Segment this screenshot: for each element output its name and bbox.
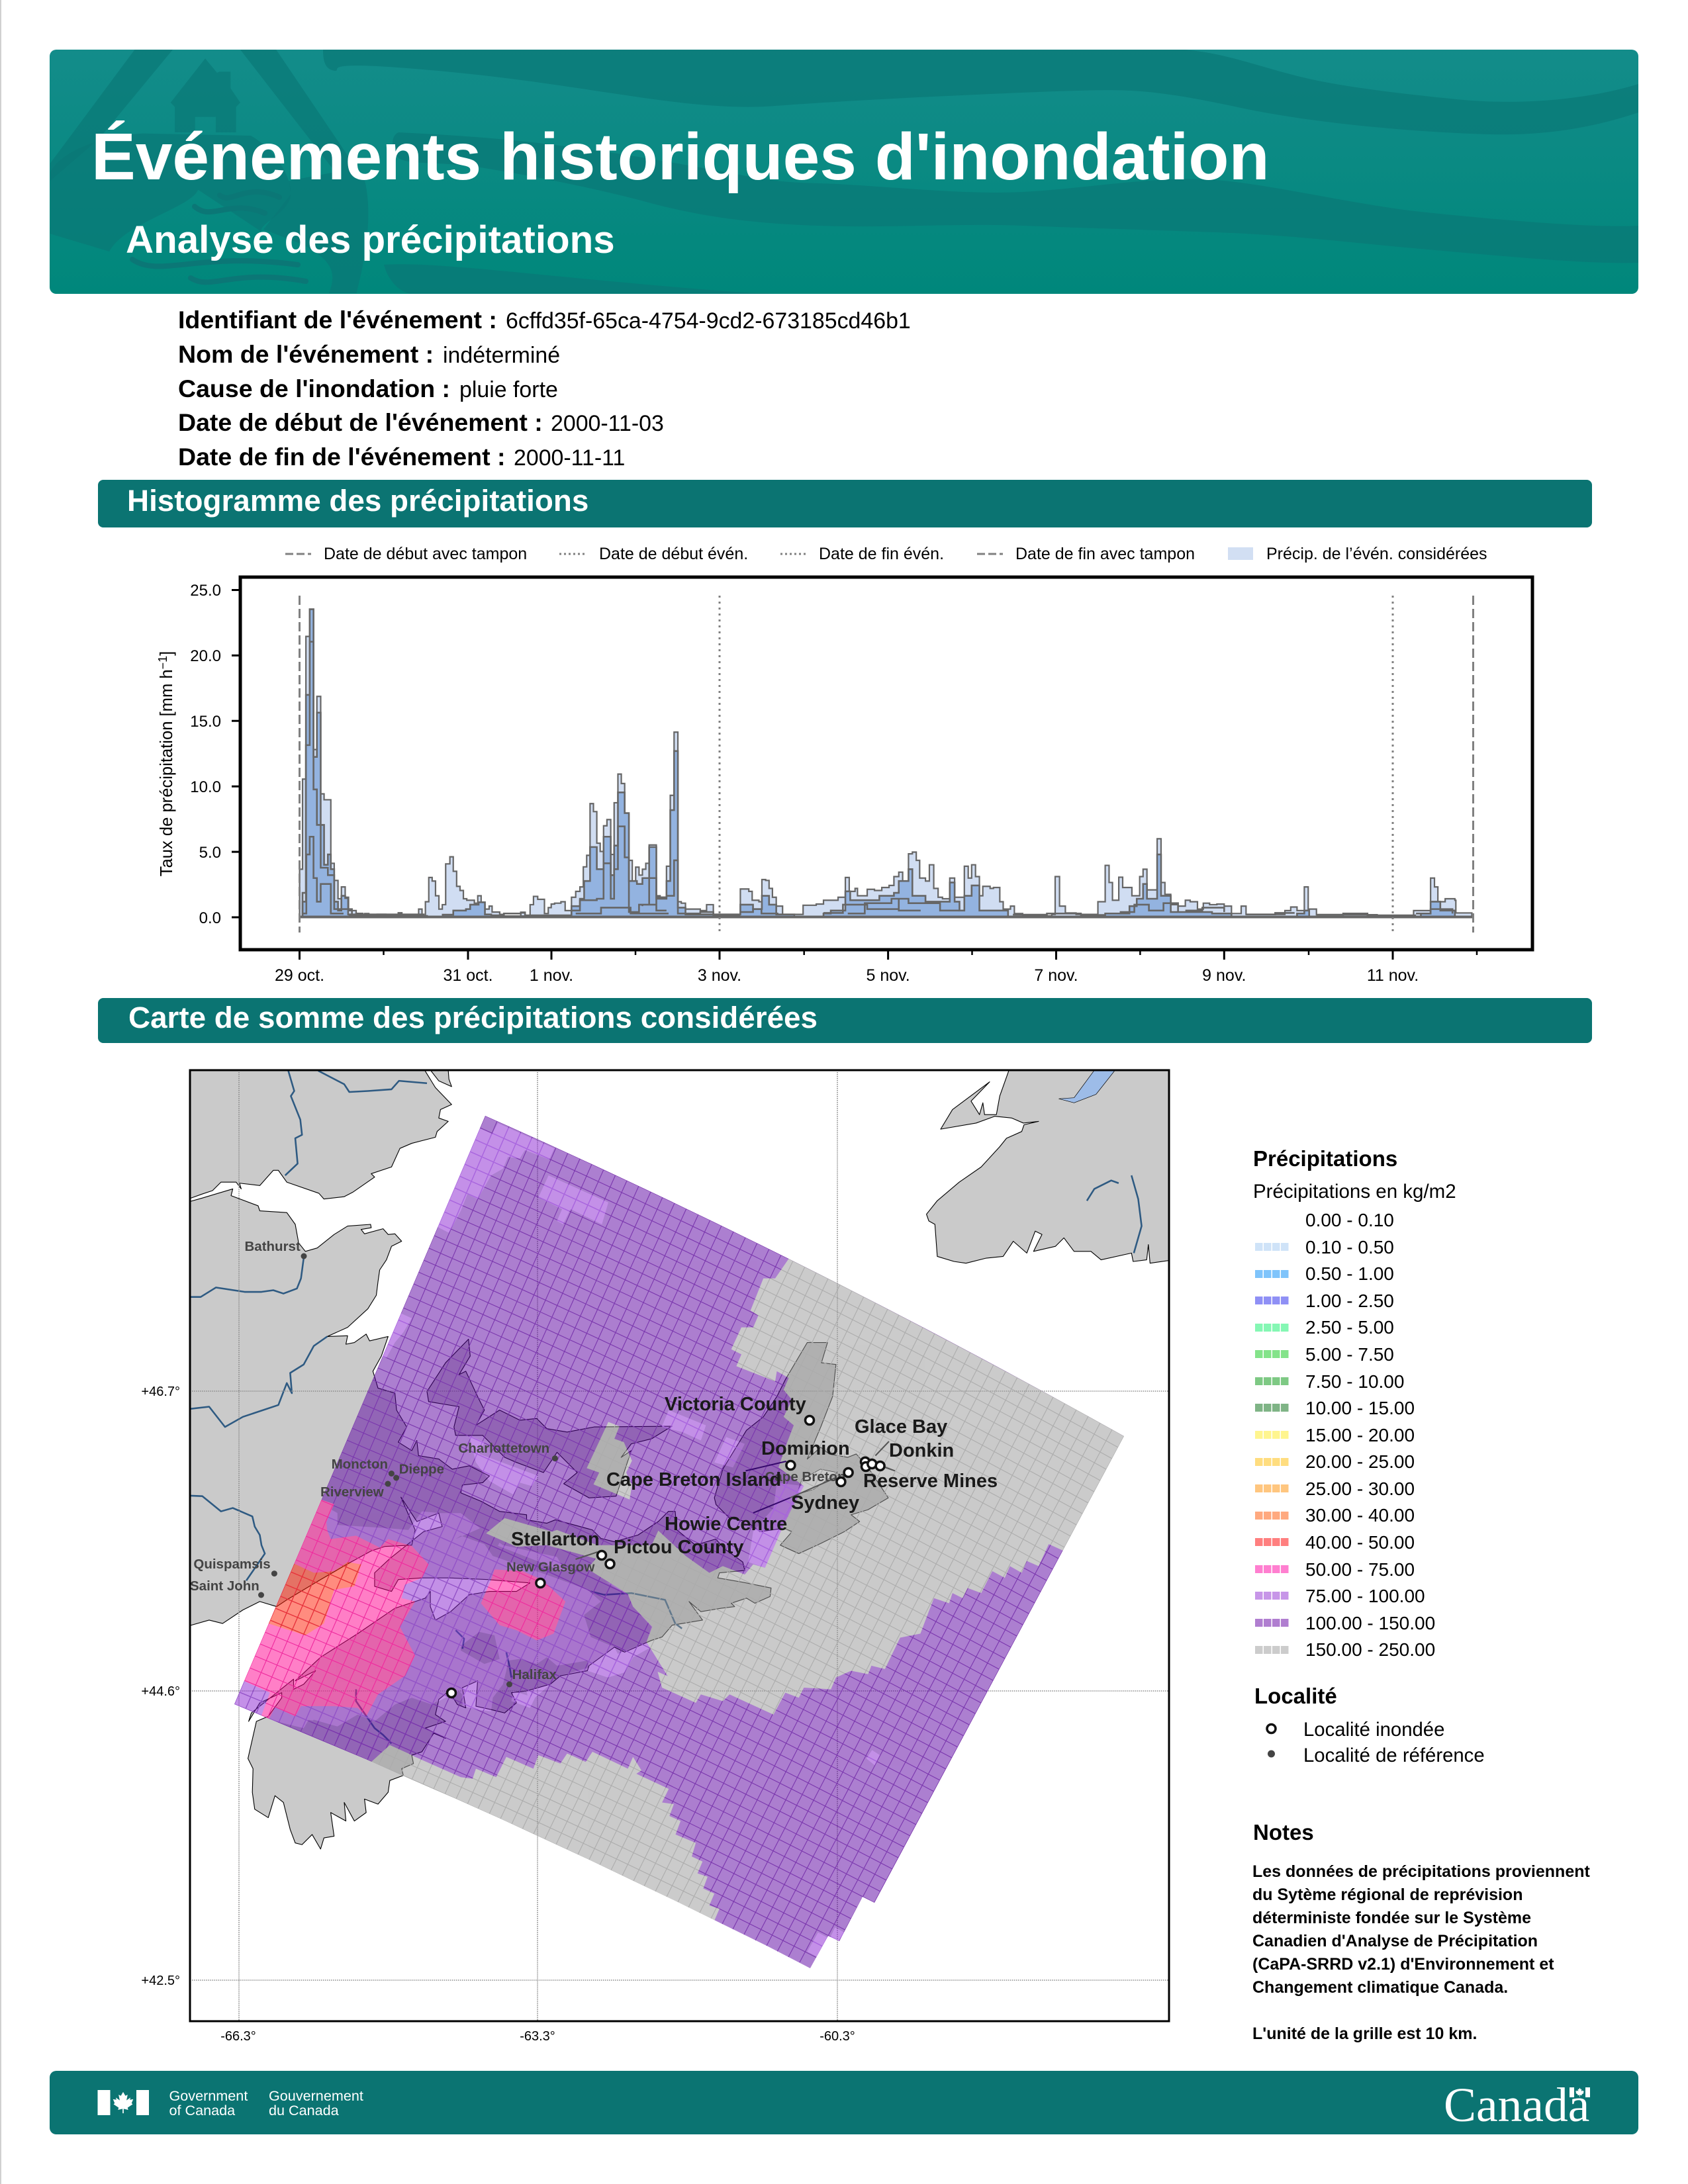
- legend class labels: 0.10 - 0.50: [1305, 1237, 1394, 1257]
- flooded locality markers: [447, 1416, 884, 1697]
- flooded locality labels: Pictou County: [614, 1537, 744, 1558]
- reference locality labels: Quispamsis: [193, 1557, 271, 1572]
- legend swatches: [1255, 1247, 1289, 1650]
- flooded locality labels: Sydney: [791, 1492, 859, 1514]
- reference locality labels: New Glasgow: [506, 1559, 594, 1575]
- land masses: [185, 1066, 1174, 1849]
- field: event id: Identifiant de l'événement :: [178, 306, 497, 334]
- x axis ticks and labels: 11 nov.: [1367, 966, 1419, 985]
- flooded locality labels: [511, 1394, 998, 1558]
- notes paragraph: [1252, 1862, 1590, 2043]
- flooded locality labels: Dominion: [761, 1438, 850, 1459]
- legend class labels: 0.50 - 1.00: [1305, 1263, 1394, 1284]
- reference locality labels: Saint John: [190, 1578, 259, 1594]
- reference locality labels: Riverview: [320, 1484, 384, 1500]
- legend class labels: 40.00 - 50.00: [1305, 1532, 1415, 1553]
- map latitude labels: +42.5°: [141, 1974, 180, 1988]
- plot frame: [240, 577, 1532, 950]
- legend: considered precipitation: Précip. de l’évén. considérées: [1266, 545, 1487, 563]
- field: end date: Date de fin de l'événement :: [178, 443, 505, 471]
- map of considered precipitation: [141, 1066, 1174, 2044]
- reference locality labels: Halifax: [512, 1667, 557, 1682]
- field: event name: Nom de l'événement :: [178, 340, 434, 368]
- y axis ticks and labels: 20.0: [190, 647, 221, 665]
- field: event name: indéterminé: [443, 343, 560, 368]
- legend: event end: Date de fin évén.: [819, 545, 944, 563]
- reference locality labels: [190, 1239, 845, 1682]
- notes paragraph: Changement climatique Canada.: [1252, 1978, 1508, 1997]
- icon: Canada flag symbol: [98, 2090, 149, 2115]
- legend class labels: 30.00 - 40.00: [1305, 1505, 1415, 1525]
- legend class labels: 7.50 - 10.00: [1305, 1371, 1404, 1392]
- reference locality dots: [258, 1253, 558, 1688]
- x axis ticks and labels: 1 nov.: [530, 966, 573, 985]
- buffer and event date lines: [299, 596, 1474, 933]
- marker: flooded locality: [1267, 1725, 1276, 1733]
- y axis title: Taux de précipitation [mm h: [158, 669, 176, 876]
- legend class labels: 150.00 - 250.00: [1305, 1639, 1435, 1660]
- precipitation histogram chart: [156, 577, 1532, 985]
- x axis ticks and labels: 31 oct.: [443, 966, 493, 985]
- reference locality labels: Moncton: [332, 1457, 388, 1472]
- y axis ticks and labels: 0.0: [199, 909, 221, 927]
- notes paragraph: Canadien d'Analyse de Précipitation: [1252, 1932, 1538, 1950]
- map longitude labels: -66.3°: [220, 2029, 256, 2044]
- locality legend: Localité de référence: [1303, 1745, 1485, 1766]
- legend class labels: 2.50 - 5.00: [1305, 1317, 1394, 1338]
- step series, left half: [300, 610, 794, 917]
- map latitude labels: [141, 1385, 180, 1988]
- header watermark: house and waves logo: [50, 50, 1638, 294]
- y axis ticks and labels: 25.0: [190, 582, 221, 600]
- page edge: [0, 0, 1, 2184]
- section bar: map: [98, 998, 1592, 1043]
- precipitation legend: [1253, 1146, 1456, 1660]
- legend unit: Précipitations en kg/m2: [1253, 1181, 1456, 1203]
- reference locality labels: Charlottetown: [458, 1441, 549, 1456]
- precipitation grid cell lines: [234, 1116, 1124, 1980]
- event metadata block: [178, 306, 911, 471]
- notes: [1252, 1820, 1590, 2043]
- field: event id: 6cffd35f-65ca-4754-9cd2-673185cd46b1: [506, 308, 911, 334]
- section bar: histogram: Histogramme des précipitations: [127, 484, 588, 518]
- y axis ticks and labels: 10.0: [190, 778, 221, 796]
- flooded locality labels: Donkin: [889, 1440, 954, 1461]
- section bar: map: Carte de somme des précipitations considérées: [128, 1001, 818, 1034]
- notes paragraph: déterministe fondée sur le Système: [1252, 1909, 1531, 1927]
- flooded locality labels: Cape Breton Island: [606, 1469, 781, 1490]
- precipitation grid fills: [212, 1116, 1158, 1968]
- x axis ticks and labels: 5 nov.: [866, 966, 910, 985]
- notes paragraph: Les données de précipitations proviennent: [1252, 1862, 1590, 1881]
- marker: reference locality: [1268, 1750, 1275, 1758]
- y axis ticks and labels: 5.0: [199, 844, 221, 862]
- Government of Canada signature: du Canada: [269, 2102, 340, 2118]
- flooded locality labels: Reserve Mines: [863, 1471, 998, 1492]
- Government of Canada signature: of Canada: [169, 2102, 236, 2118]
- lake: [1058, 1071, 1115, 1103]
- field: start date: Date de début de l'événement :: [178, 408, 543, 436]
- legend class labels: 50.00 - 75.00: [1305, 1559, 1415, 1580]
- notes: Notes: [1253, 1820, 1314, 1844]
- y axis title: ]: [158, 651, 176, 656]
- map longitude labels: [220, 2029, 855, 2044]
- y axis title: −1: [156, 656, 169, 669]
- legend class labels: 5.00 - 7.50: [1305, 1344, 1394, 1365]
- reference locality labels: Cape Breton: [765, 1469, 845, 1484]
- leader lines: [576, 1441, 895, 1559]
- section bar: histogram: [98, 480, 1592, 527]
- legend class labels: 25.00 - 30.00: [1305, 1479, 1415, 1499]
- legend class labels: 20.00 - 25.00: [1305, 1451, 1415, 1472]
- footer band: [50, 2071, 1638, 2134]
- notes paragraph: L'unité de la grille est 10 km.: [1252, 2025, 1477, 2043]
- x axis ticks and labels: 9 nov.: [1202, 966, 1246, 985]
- legend: start date with buffer: Date de début avec tampon: [324, 545, 527, 563]
- legend: end date with buffer: Date de fin avec tampon: [1015, 545, 1195, 563]
- map latitude labels: +44.6°: [141, 1684, 180, 1699]
- legend class labels: 1.00 - 2.50: [1305, 1291, 1394, 1311]
- Government of Canada signature: Gouvernement: [269, 2087, 363, 2104]
- x axis ticks and labels: 29 oct.: [275, 966, 324, 985]
- x axis ticks and labels: 3 nov.: [698, 966, 741, 985]
- legend class labels: 0.00 - 0.10: [1305, 1210, 1394, 1230]
- flooded locality labels: Glace Bay: [855, 1416, 947, 1437]
- baseline: [299, 916, 1474, 919]
- subtitle: Analyse des précipitations: [126, 218, 615, 261]
- map latitude labels: +46.7°: [141, 1385, 180, 1399]
- legend class labels: 10.00 - 15.00: [1305, 1398, 1415, 1418]
- field: cause: Cause de l'inondation :: [178, 375, 450, 402]
- field: start date: 2000-11-03: [551, 411, 664, 436]
- locality legend: Localité inondée: [1303, 1719, 1444, 1741]
- flooded locality labels: Howie Centre: [665, 1514, 787, 1535]
- legend: event start: Date de début évén.: [599, 545, 748, 563]
- flooded locality labels: Stellarton: [511, 1529, 600, 1550]
- legend heading: Précipitations: [1253, 1146, 1397, 1171]
- field: end date: 2000-11-11: [514, 445, 625, 471]
- reference locality labels: Bathurst: [245, 1239, 301, 1254]
- map longitude labels: -60.3°: [820, 2029, 855, 2044]
- field: cause: pluie forte: [459, 377, 558, 402]
- step series, right half: [794, 839, 1472, 917]
- graticule: [190, 1070, 1169, 2021]
- legend class labels: [1305, 1210, 1435, 1660]
- locality legend: Localité: [1254, 1684, 1337, 1708]
- legend class labels: 100.00 - 150.00: [1305, 1613, 1435, 1633]
- notes paragraph: (CaPA-SRRD v2.1) d'Environnement et: [1252, 1955, 1554, 1974]
- locality legend: [1254, 1684, 1485, 1766]
- y axis ticks and labels: 15.0: [190, 713, 221, 731]
- map frame: [190, 1070, 1169, 2021]
- notes paragraph: du Sytème régional de reprévision: [1252, 1886, 1523, 1904]
- Government of Canada signature: [169, 2087, 363, 2118]
- header banner: [50, 50, 1638, 294]
- legend class labels: 15.00 - 20.00: [1305, 1425, 1415, 1445]
- Canada wordmark: Canada: [1444, 2078, 1589, 2132]
- flooded locality labels: Victoria County: [665, 1394, 806, 1415]
- x axis ticks and labels: [275, 950, 1477, 985]
- x axis ticks and labels: 7 nov.: [1034, 966, 1078, 985]
- rivers: [185, 1066, 1142, 1743]
- reference locality labels: Dieppe: [399, 1461, 444, 1477]
- y axis ticks and labels: [190, 582, 240, 927]
- Government of Canada signature: Government: [169, 2087, 248, 2104]
- legend class labels: 75.00 - 100.00: [1305, 1586, 1425, 1606]
- title: Événements historiques d'inondation: [91, 120, 1270, 194]
- histogram legend: [285, 545, 1487, 563]
- map longitude labels: -63.3°: [520, 2029, 555, 2044]
